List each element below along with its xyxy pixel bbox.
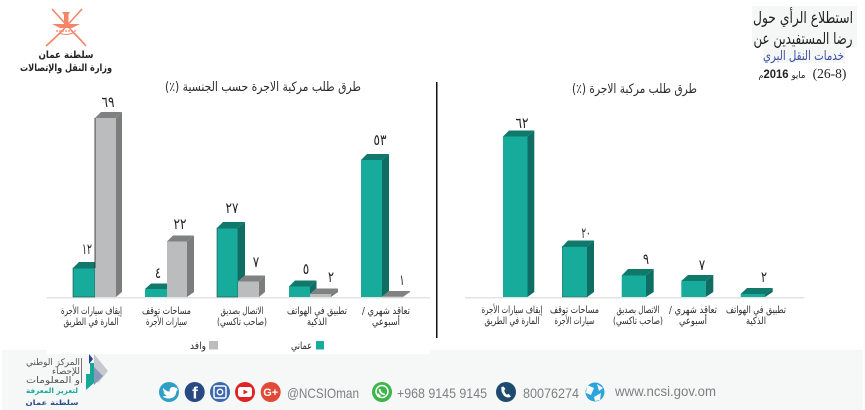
bars: smartphone app [289, 280, 338, 297]
toll-free number: 80076274 [523, 385, 579, 401]
icon: Oman emblem [46, 9, 86, 46]
icon: twitter [159, 382, 179, 402]
bars: road hail [73, 112, 122, 297]
right chart: overall [465, 82, 804, 327]
category labels: الاتصال بصديق [220, 306, 264, 317]
value labels: ٢ [761, 268, 767, 286]
legend: وافد [190, 341, 206, 352]
category labels: الذكية [307, 317, 327, 328]
NCSI logo [26, 354, 108, 407]
ministry name: وزارة النقل والإتصالات [20, 63, 112, 74]
value labels [82, 93, 404, 289]
category labels: الذكية [746, 316, 766, 327]
value labels: ٢٢ [174, 215, 186, 233]
chart title: طرق طلب مركبة الاجرة حسب الجنسية (٪) [165, 80, 361, 95]
value labels: ٢٧ [226, 199, 238, 217]
category labels: (صاحب تاكسي) [613, 316, 663, 327]
survey header [752, 6, 857, 81]
bars: taxi parking [145, 236, 194, 297]
survey header: خدمات النقل البري [763, 49, 844, 64]
logo text: للإحصاء [52, 367, 80, 377]
left chart: by nationality [47, 80, 430, 352]
category labels [482, 303, 786, 327]
value labels: ٥ [303, 260, 309, 278]
social media row [159, 382, 716, 402]
value labels [516, 114, 767, 286]
icon: whatsapp [372, 382, 392, 402]
category labels: (صاحب تاكسي) [217, 317, 267, 328]
divider between charts [436, 82, 438, 338]
icon: google plus: G+ [263, 387, 278, 399]
bar: call a friend 9 [622, 269, 654, 297]
bar: road hail 62 [503, 130, 534, 297]
value labels: ٧ [253, 253, 259, 271]
ministry name [20, 50, 112, 74]
ministry logo [20, 9, 112, 74]
value labels: ٦٢ [516, 114, 528, 132]
value labels: ٦٩ [102, 93, 114, 111]
ministry name: سلطنة عمان [38, 50, 94, 61]
category labels: أسبوعي [372, 315, 400, 328]
category labels: أسبوعي [679, 314, 707, 327]
chart title: طرق طلب مركبة الاجرة (٪) [572, 82, 697, 97]
logo text: سلطنة عمان [26, 399, 79, 407]
value labels: ٤ [155, 264, 161, 282]
axis line [465, 297, 804, 298]
legend [190, 341, 324, 352]
value labels: ٥٣ [374, 131, 386, 149]
phone number: +968 9145 9145 [397, 385, 487, 401]
value labels: ٩ [643, 250, 649, 268]
value labels: ١ [400, 271, 404, 289]
category labels: تعاقد شهري / [362, 306, 410, 317]
bar: smartphone app 2 [741, 288, 773, 297]
category labels [61, 304, 410, 328]
bars: monthly contract [361, 154, 410, 298]
logo text: و المعلومات [26, 376, 80, 386]
logo mark [86, 354, 108, 390]
category labels: مساحات توقف [142, 306, 191, 317]
icon: facebook [185, 382, 205, 402]
category labels: سيارات الأجرة [146, 315, 187, 328]
category labels: الاتصال بصديق [616, 305, 660, 316]
legend: عماني [291, 341, 312, 352]
logo text: المركز الوطني [26, 358, 80, 368]
category labels: تطبيق في الهواتف [726, 305, 786, 316]
category labels: المارة في الطريق [64, 317, 118, 328]
category labels: تعاقد شهري / [669, 305, 717, 316]
survey header: مايو [791, 71, 806, 81]
icon: instagram [210, 382, 230, 402]
survey header: (26-8) [813, 66, 846, 81]
social handle: @NCSIOman [287, 385, 359, 401]
icon: google plus [261, 382, 281, 402]
footer background band [2, 350, 863, 410]
category labels: إيقاف سيارات الأجرة [61, 304, 122, 317]
axis line [47, 297, 430, 298]
category labels: المارة في الطريق [484, 316, 540, 327]
category labels: إيقاف سيارات الأجرة [482, 303, 543, 316]
logo text: لتعزيز المعرفة [26, 387, 78, 395]
category labels: تطبيق في الهواتف [287, 306, 347, 317]
bar: taxi parking 20 [562, 240, 594, 297]
icon: facebook: f [192, 384, 198, 402]
category labels: سيارات الأجرة [554, 314, 594, 327]
bars: call a friend [217, 222, 265, 297]
icon: phone [496, 382, 516, 402]
icon: youtube [235, 382, 255, 402]
website: www.ncsi.gov.om [614, 383, 716, 399]
value labels: ٢٠ [582, 224, 590, 242]
value labels: ٢ [328, 268, 334, 286]
logo text [26, 358, 80, 407]
survey header: 2016 [764, 69, 788, 81]
category labels: مساحات توقف [550, 305, 599, 316]
value labels: ١٢ [82, 240, 92, 258]
value labels: ٧ [699, 256, 705, 274]
survey header: م [759, 71, 764, 80]
icon: globe [586, 382, 604, 402]
bar: monthly contract 7 [681, 275, 713, 297]
